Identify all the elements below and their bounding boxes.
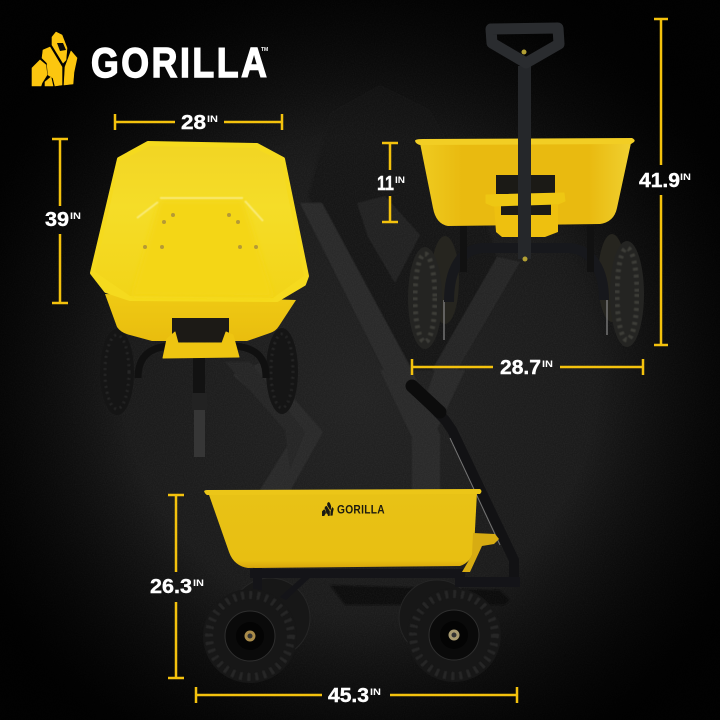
dimension: height 41.9 in xyxy=(639,19,691,345)
tub rim xyxy=(92,143,307,300)
front wheel xyxy=(203,589,297,683)
rear wheels xyxy=(230,578,475,658)
handle bracket xyxy=(163,332,239,358)
dimension: length 39 in: 39 xyxy=(45,209,69,231)
dimension: depth 11 in xyxy=(377,143,405,222)
bolts xyxy=(143,213,258,249)
dimension: height 41.9 in: IN xyxy=(680,172,691,182)
dimension: length 45.3 in: 45.3 xyxy=(328,685,369,707)
tub exterior xyxy=(105,294,296,341)
dimension: length 39 in xyxy=(45,139,81,303)
dimension: length 39 in: IN xyxy=(70,211,81,221)
axle frame xyxy=(449,248,604,302)
icon: gorilla xyxy=(32,32,77,86)
dimension: height 26.3 in xyxy=(150,495,204,678)
chassis xyxy=(250,568,520,600)
dimension: height 26.3 in: IN xyxy=(193,578,204,588)
wagon: side view xyxy=(203,386,520,683)
wheels and tongue xyxy=(100,328,298,457)
dimension: length 45.3 in xyxy=(196,685,517,707)
dimension: length 45.3 in: IN xyxy=(370,687,381,697)
bracket xyxy=(462,533,499,572)
wordmark: GORILLA xyxy=(91,40,267,87)
dimension: width 28.7 in: 28.7 xyxy=(500,357,541,379)
dimension: height 26.3 in: 26.3 xyxy=(150,576,192,598)
dimension: width 28 in: 28 xyxy=(181,112,206,134)
tub interior xyxy=(95,146,304,298)
logo: Gorilla brand xyxy=(32,32,268,87)
dimension: height 41.9 in: 41.9 xyxy=(639,170,680,192)
rear tires xyxy=(408,234,644,349)
tub xyxy=(420,143,631,226)
handle bar of bracket xyxy=(486,193,565,206)
dimension: width 28 in xyxy=(115,112,282,134)
trademark: TM xyxy=(261,47,268,53)
tub side xyxy=(208,492,477,568)
brand text: GORILLA xyxy=(337,504,385,517)
hitch plate xyxy=(172,318,229,342)
handle xyxy=(491,28,559,262)
plates xyxy=(496,175,555,194)
tub rim xyxy=(204,489,482,495)
back wheel xyxy=(407,588,501,682)
cart branding xyxy=(322,502,385,517)
dimension: width 28.7 in: IN xyxy=(542,359,553,369)
icon: mini gorilla xyxy=(322,502,334,516)
dimension: depth 11 in: IN xyxy=(395,175,405,185)
wagon: top view xyxy=(92,143,307,457)
dimension: width 28 in: IN xyxy=(207,114,218,124)
wagon: rear view xyxy=(408,28,644,349)
handle arm xyxy=(412,386,514,580)
dimension: depth 11 in: 11 xyxy=(377,173,394,195)
lip xyxy=(494,205,558,237)
dimension: width 28.7 in xyxy=(412,357,643,379)
